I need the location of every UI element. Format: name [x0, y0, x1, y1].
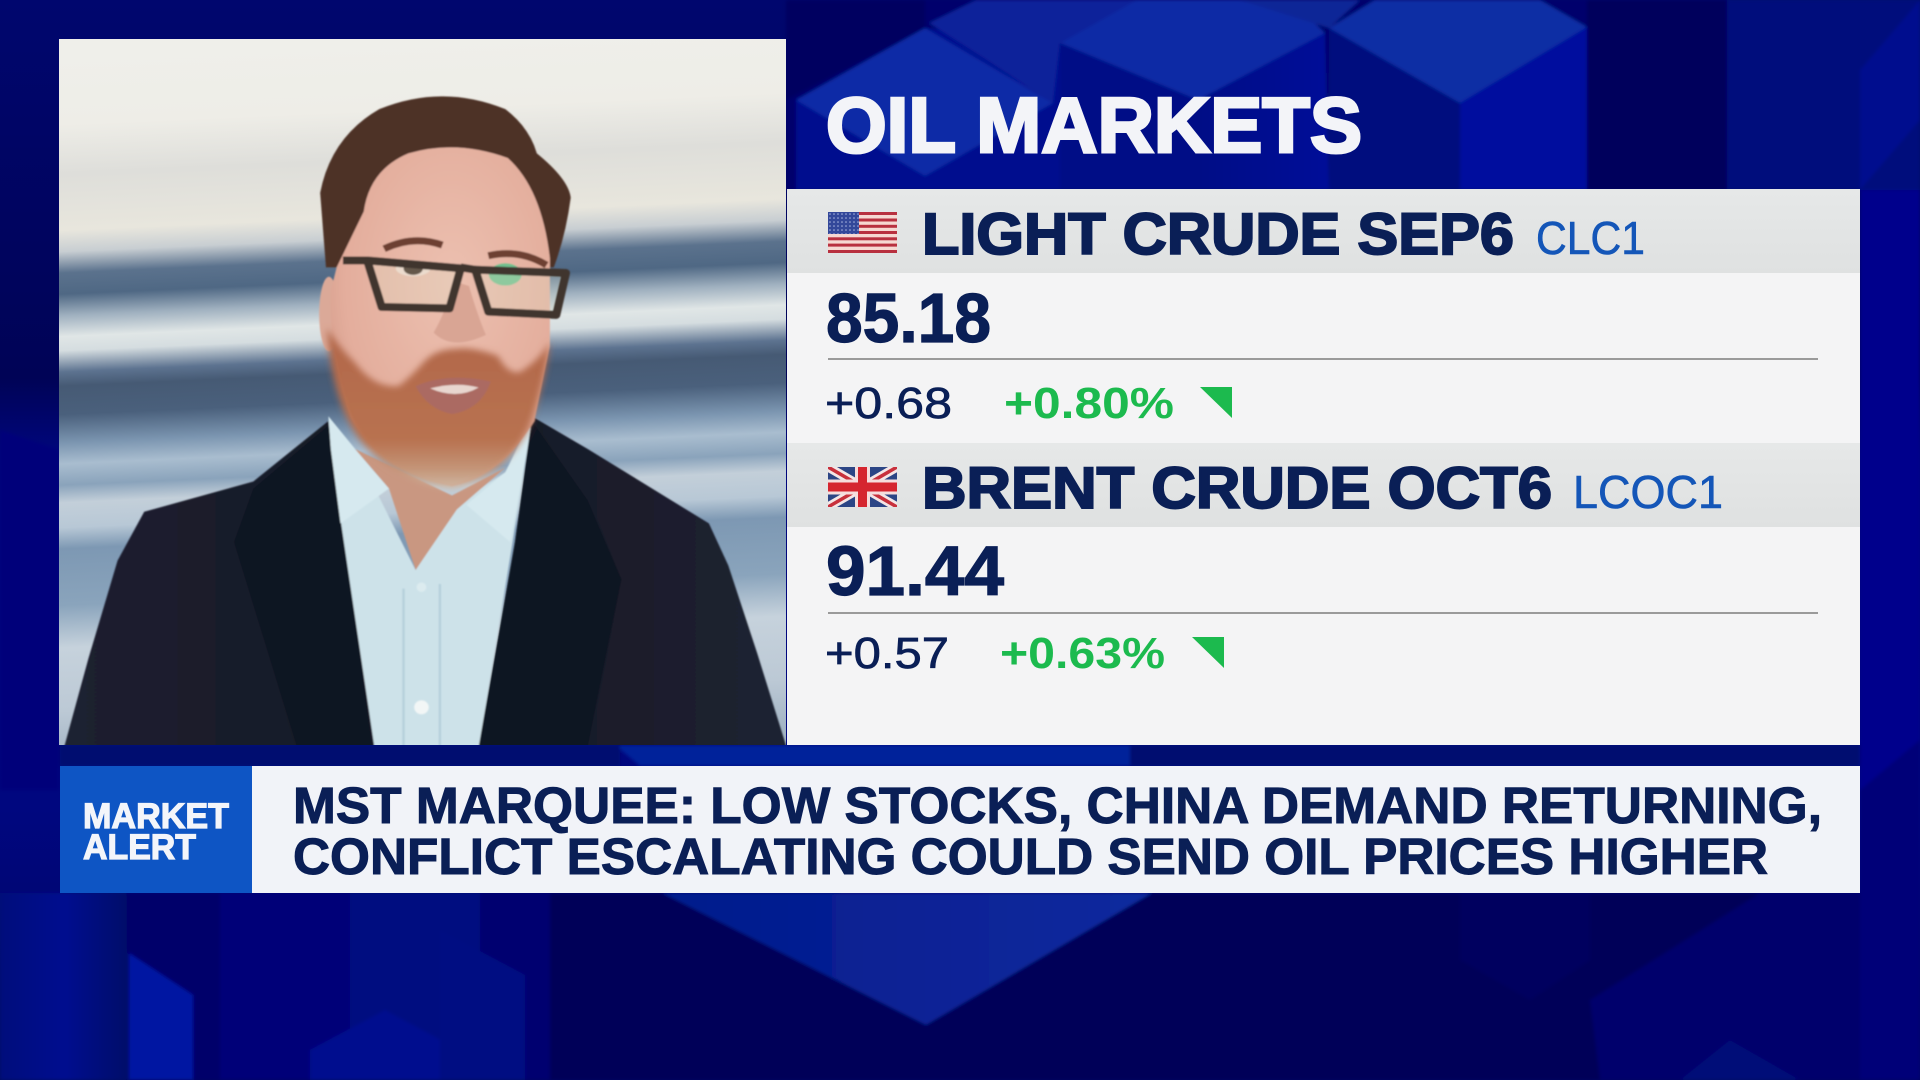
market alert badge: ALERT [83, 828, 196, 867]
arrow: green up corner [1200, 387, 1232, 418]
headline line 2: CONFLICT ESCALATING COULD SEND OIL PRICES HIGHER [293, 828, 1768, 885]
heading: OIL MARKETS: OIL MARKETS [826, 81, 1362, 169]
eyes and lens reflection [396, 260, 522, 286]
market alert badge: MARKET [83, 797, 229, 836]
header row: light crude [787, 189, 1860, 273]
lower third bar [60, 766, 1860, 893]
mouth [416, 378, 491, 414]
icon: US flag [828, 212, 897, 253]
neck [355, 449, 505, 570]
header row: brent crude [787, 443, 1860, 527]
change: +0.57: +0.57 [825, 629, 949, 678]
beard [327, 328, 550, 489]
market alert badge [60, 766, 252, 893]
divider 2 [828, 612, 1818, 614]
lenses [373, 265, 562, 312]
percent change: +0.80%: +0.80% [1004, 379, 1174, 428]
price: 91.44: 91.44 [826, 532, 1004, 610]
shirt collar [328, 416, 532, 542]
face [331, 147, 550, 486]
hair [320, 96, 571, 267]
price: 85.18: 85.18 [826, 279, 991, 357]
percent change: +0.63%: +0.63% [1000, 629, 1165, 678]
glasses [343, 260, 566, 315]
video panel: guest speaker [59, 39, 786, 747]
label: Light Crude Sep6: LIGHT CRUDE SEP6 [922, 202, 1514, 267]
jacket [64, 416, 786, 747]
shirt buttons [414, 583, 429, 714]
arrow: green up corner [1192, 637, 1224, 668]
headline background [252, 766, 1860, 893]
ticker: LCOC1: LCOC1 [1573, 466, 1723, 518]
placket [404, 584, 440, 747]
quote panel [787, 189, 1860, 745]
divider 1 [828, 358, 1818, 360]
icon: UK flag [828, 467, 897, 507]
shirt [328, 416, 532, 747]
ticker: CLC1: CLC1 [1536, 212, 1645, 264]
lapels [234, 421, 622, 747]
label: Brent Crude Oct6: BRENT CRUDE OCT6 [922, 456, 1552, 521]
ear [318, 276, 334, 352]
headline line 1: MST MARQUEE: LOW STOCKS, CHINA DEMAND RETURNING, [293, 777, 1822, 834]
change: +0.68: +0.68 [825, 379, 952, 428]
eyebrows [384, 241, 547, 265]
nose [434, 281, 486, 343]
